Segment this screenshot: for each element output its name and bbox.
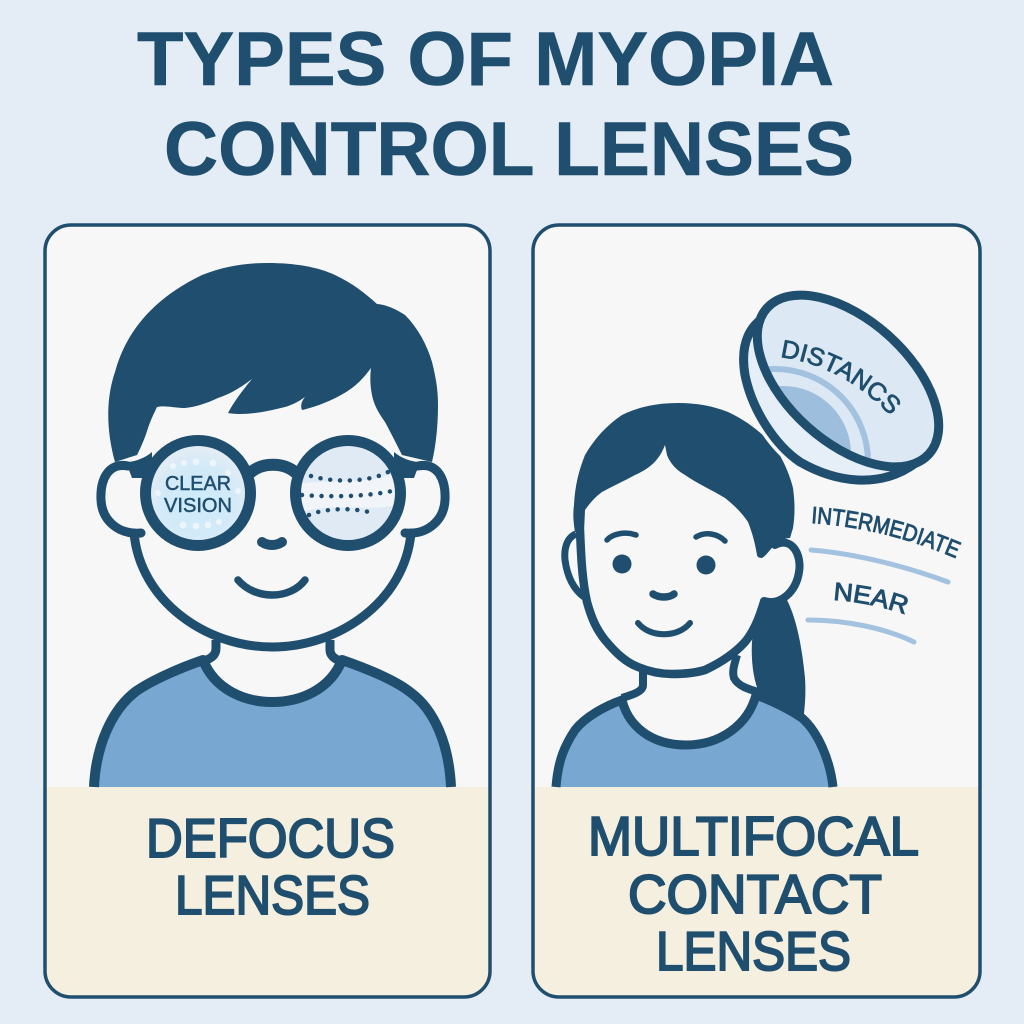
girl hair	[573, 403, 794, 558]
illustration: boy with glasses	[94, 263, 451, 787]
girl face	[580, 530, 764, 674]
frames	[126, 440, 420, 546]
caption: defocus lenses: LENSES	[175, 864, 370, 926]
caption band: multifocal	[534, 787, 979, 996]
clear vision lens	[151, 446, 245, 540]
girl eyebrows	[607, 533, 725, 541]
lens dots	[155, 459, 241, 529]
boy hair	[108, 263, 438, 462]
girl ponytail	[752, 600, 805, 722]
title: TYPES OF MYOPIA	[137, 17, 834, 102]
boy glasses	[126, 440, 420, 546]
girl nose	[653, 594, 674, 597]
title	[137, 17, 854, 192]
lens rim	[726, 263, 970, 499]
caption: multifocal contact lenses	[588, 805, 919, 982]
girl mouth	[638, 623, 690, 634]
caption band: defocus	[46, 787, 489, 996]
panel border	[533, 225, 980, 997]
caption: multifocal contact lenses: CONTACT	[628, 863, 882, 925]
defocus dotted lines	[302, 472, 392, 515]
distance label: DISTANCS	[782, 340, 900, 414]
panel: defocus lenses	[45, 225, 490, 997]
lens bowl	[744, 312, 917, 480]
caption: defocus lenses: DEFOCUS	[146, 807, 395, 869]
caption: defocus lenses	[146, 807, 395, 926]
line: near	[808, 620, 914, 642]
panel: multifocal contact lenses	[531, 223, 982, 999]
illustration: girl	[556, 403, 833, 787]
title: CONTROL LENSES	[164, 107, 854, 192]
caption: multifocal contact lenses: LENSES	[656, 920, 851, 982]
defocus clear band	[302, 472, 395, 512]
boy ears	[101, 465, 445, 533]
panel border	[45, 225, 490, 997]
boy face	[134, 533, 411, 647]
caption: multifocal contact lenses: MULTIFOCAL	[588, 805, 919, 867]
line: intermediate	[811, 550, 948, 582]
label: near: NEAR	[834, 582, 908, 615]
lens halo	[744, 312, 917, 480]
clear vision label: CLEAR	[165, 472, 231, 495]
boy shirt	[94, 660, 451, 787]
clear vision label: VISION	[164, 494, 232, 517]
label: intermediate: INTERMEDIATE	[812, 506, 962, 558]
lens rings	[768, 366, 871, 458]
boy neck	[204, 640, 342, 662]
defocus lens	[301, 446, 395, 540]
girl neck	[622, 655, 758, 698]
girl shirt	[556, 695, 833, 787]
clear vision label	[164, 472, 232, 517]
boy nose	[262, 542, 282, 545]
girl left ear	[565, 534, 584, 597]
girl eyes	[612, 554, 716, 574]
boy mouth	[238, 580, 305, 595]
lens inner	[732, 268, 964, 494]
icon: contact lens	[739, 290, 944, 485]
girl right ear	[764, 543, 800, 602]
